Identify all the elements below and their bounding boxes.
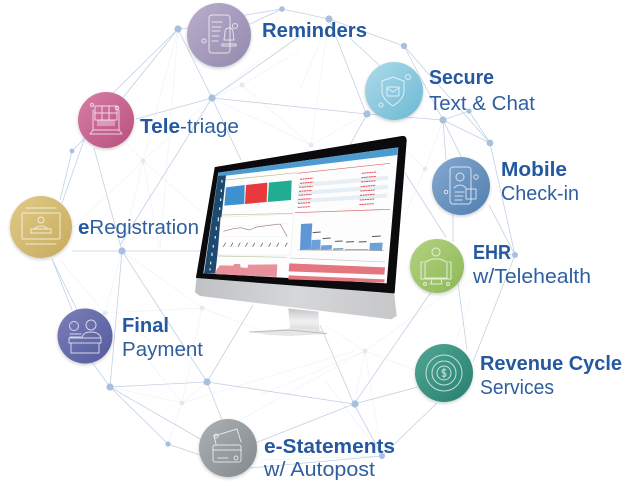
- node: eRegistration: [10, 196, 72, 258]
- network nodes: [70, 6, 518, 459]
- monitor bezel: [197, 137, 406, 293]
- label: Reminders: Reminders: [262, 20, 367, 42]
- monitor chin: [195, 276, 397, 319]
- screen: [203, 147, 398, 283]
- monitor with dashboard: [195, 137, 406, 336]
- card panel rule: [218, 173, 297, 257]
- blue card: [224, 185, 245, 206]
- sidebar: [204, 175, 226, 274]
- line chart: [218, 214, 293, 255]
- label: Secure Text & Chat: [429, 67, 535, 115]
- label: e-Statements w/ Autopost: w/ Autopost: [263, 459, 375, 481]
- label: Mobile Check-in: Mobile: [501, 159, 567, 181]
- label: Revenue Cycle Services: Services: [480, 377, 554, 399]
- node: tele-triage: [78, 92, 134, 148]
- green card: [268, 180, 292, 202]
- top bar: [218, 147, 398, 177]
- node: final payment: [58, 308, 112, 364]
- label: Final Payment: Final: [122, 315, 169, 337]
- label: Final Payment: [122, 315, 203, 361]
- label: Secure Text & Chat: Text & Chat: [429, 93, 535, 115]
- label: Revenue Cycle Services: [480, 353, 622, 399]
- alert rows: [288, 258, 385, 283]
- label: EHR w/Telehealth: w/Telehealth: [472, 266, 591, 288]
- node: mobile check-in: [432, 157, 490, 215]
- monitor stand: [248, 308, 327, 336]
- red card: [245, 183, 267, 204]
- node: EHR: [410, 239, 464, 293]
- label: Tele-triage: Tele-triage: [140, 116, 239, 138]
- node: revenue cycle: [415, 344, 473, 402]
- label: e-Statements w/ Autopost: [263, 436, 395, 481]
- network mesh background: [52, 9, 515, 468]
- label: Secure Text & Chat: Secure: [429, 67, 494, 89]
- node: e-statements: [199, 419, 257, 477]
- label: Mobile Check-in: [501, 159, 579, 205]
- bar chart: [298, 223, 384, 251]
- node: secure text and chat: [365, 62, 423, 120]
- label: Revenue Cycle Services: Revenue Cycle: [480, 353, 622, 375]
- pink bar chart: [215, 264, 277, 277]
- label: EHR w/Telehealth: [472, 242, 591, 288]
- node: reminders: [187, 3, 251, 67]
- label: eRegistration: eRegistration: [78, 217, 199, 239]
- sidebar icons: [210, 180, 222, 270]
- alert table: [295, 163, 390, 213]
- label: Mobile Check-in: Check-in: [501, 183, 579, 205]
- label: Final Payment: Payment: [122, 339, 203, 361]
- label: e-Statements w/ Autopost: e-Statements: [264, 436, 395, 458]
- label: EHR w/Telehealth: EHR: [473, 242, 511, 264]
